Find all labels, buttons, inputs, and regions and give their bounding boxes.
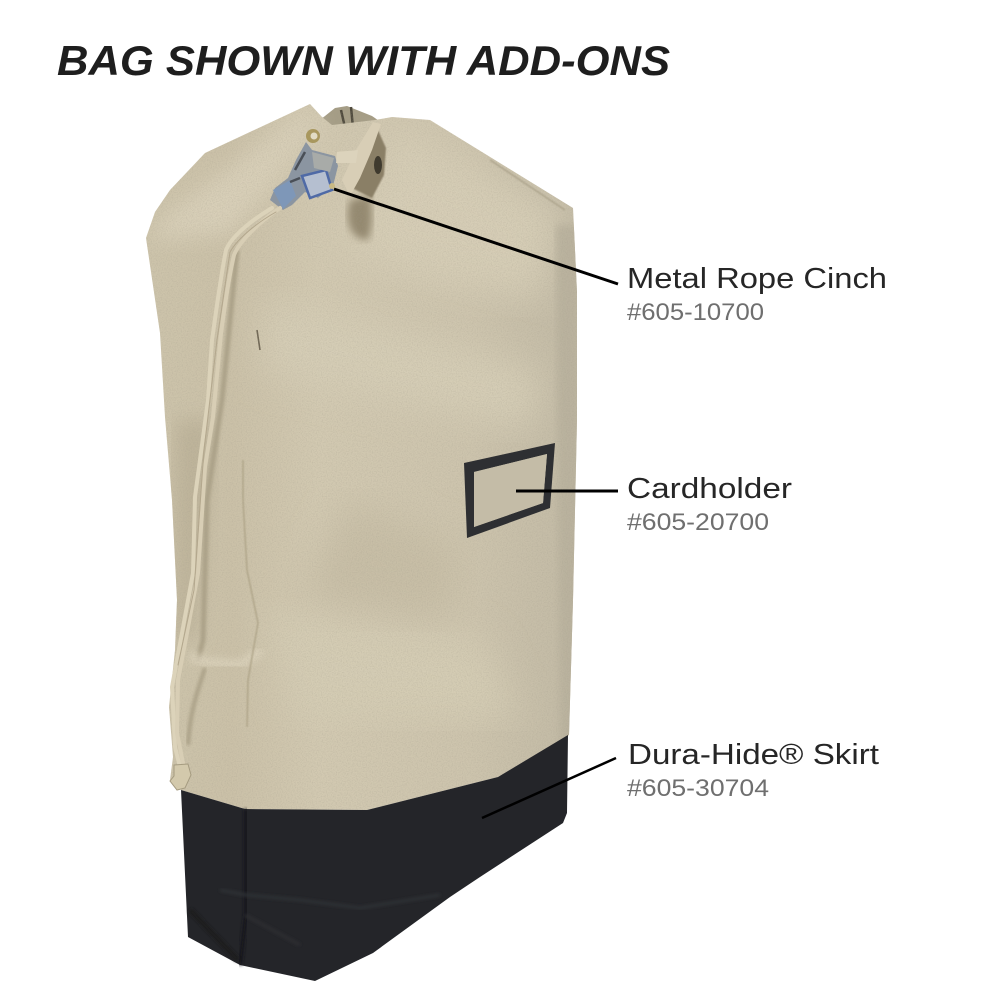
title: BAG SHOWN WITH ADD-ONS: [57, 37, 670, 84]
pleat shadow: [348, 195, 372, 240]
label: metal rope cinch: Metal Rope Cinch: [627, 263, 887, 295]
leader line: metal rope cinch: [334, 189, 618, 284]
label: cardholder: Cardholder: [627, 473, 792, 505]
eyelet: [306, 129, 320, 143]
canvas body: [146, 104, 577, 810]
label: metal rope cinch: #605-10700: [627, 299, 764, 326]
pleat flap: [342, 122, 381, 196]
label: cardholder: [627, 473, 792, 536]
label: skirt: [627, 739, 879, 802]
drawstring rope: [172, 208, 280, 767]
icon: metal rope cinch: [270, 142, 358, 210]
Dura-Hide skirt: [181, 735, 568, 981]
label: skirt: #605-30704: [627, 775, 769, 802]
lower fold: [188, 668, 205, 745]
crease at shoulder: [490, 160, 565, 210]
metal ring at mouth: [341, 107, 354, 138]
label: skirt: Dura-Hide® Skirt: [628, 739, 879, 771]
rope knot: [170, 764, 191, 790]
side seam: [257, 330, 260, 350]
bag illustration: [140, 100, 585, 981]
leader line: cardholder: [516, 490, 618, 492]
grain texture: [140, 100, 585, 815]
canvas shading: [140, 100, 585, 815]
label: cardholder: #605-20700: [627, 509, 769, 536]
shadow beside rope: [198, 250, 237, 660]
cardholder: [464, 443, 555, 538]
leader line: skirt: [482, 758, 616, 818]
bag inner mouth: [320, 106, 385, 190]
pleat gap: [352, 128, 386, 198]
eyelet on far side: [374, 156, 382, 174]
skirt folds: [190, 809, 440, 965]
label: metal rope cinch: [627, 263, 887, 326]
